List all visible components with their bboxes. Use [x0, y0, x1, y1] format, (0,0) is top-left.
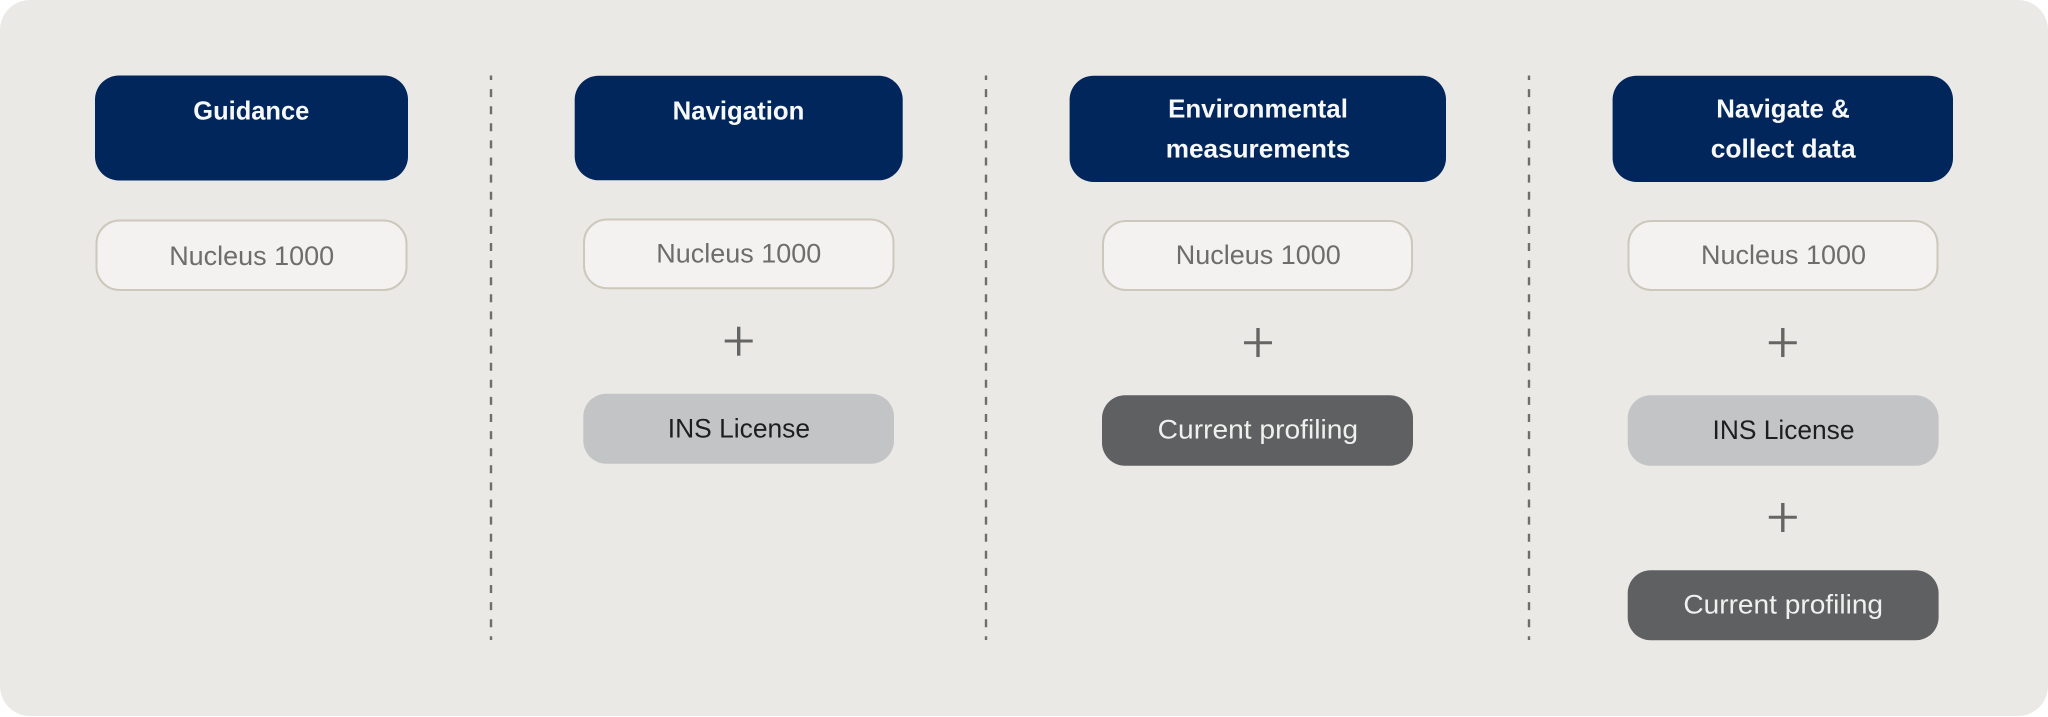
box: Nucleus 1000: Nucleus 1000	[656, 238, 821, 268]
heading: Navigate and collect data: collect data	[1711, 133, 1856, 163]
heading: Guidance	[95, 76, 408, 180]
heading: Environmental measurements: Environmental	[1168, 94, 1348, 124]
box: INS License	[583, 394, 894, 464]
icon: plus	[1769, 503, 1797, 532]
icon: plus	[725, 327, 753, 356]
box: Current profiling	[1102, 395, 1413, 466]
heading: Environmental measurements: measurements	[1166, 133, 1350, 163]
box: Current profiling: Current profiling	[1683, 589, 1883, 619]
heading: Environmental measurements	[1070, 76, 1446, 182]
box: Nucleus 1000: Nucleus 1000	[1701, 240, 1866, 270]
heading: Navigate and collect data: Navigate &	[1716, 94, 1850, 124]
box: INS License: INS License	[668, 413, 810, 443]
icon: plus	[1244, 328, 1272, 357]
column: Environmental measurements	[1070, 76, 1446, 466]
heading: Navigate and collect data	[1613, 76, 1953, 182]
box: Nucleus 1000	[584, 220, 894, 288]
box: Current profiling: Current profiling	[1158, 415, 1358, 445]
box: INS License	[1628, 395, 1939, 466]
heading: Navigation: Navigation	[673, 95, 804, 125]
box: Nucleus 1000: Nucleus 1000	[1176, 240, 1341, 270]
heading: Navigation	[575, 76, 903, 180]
column: Navigate and collect data	[1613, 76, 1953, 640]
box: Nucleus 1000	[1628, 221, 1938, 290]
box: Nucleus 1000	[1103, 221, 1412, 290]
icon: plus	[1769, 328, 1797, 357]
box: Current profiling	[1628, 570, 1939, 640]
column: Guidance	[95, 76, 408, 290]
box: INS License: INS License	[1712, 415, 1854, 445]
box: Nucleus 1000: Nucleus 1000	[169, 241, 334, 271]
column: Navigation	[575, 76, 903, 464]
box: Nucleus 1000	[96, 220, 406, 290]
heading: Guidance: Guidance	[193, 95, 309, 125]
